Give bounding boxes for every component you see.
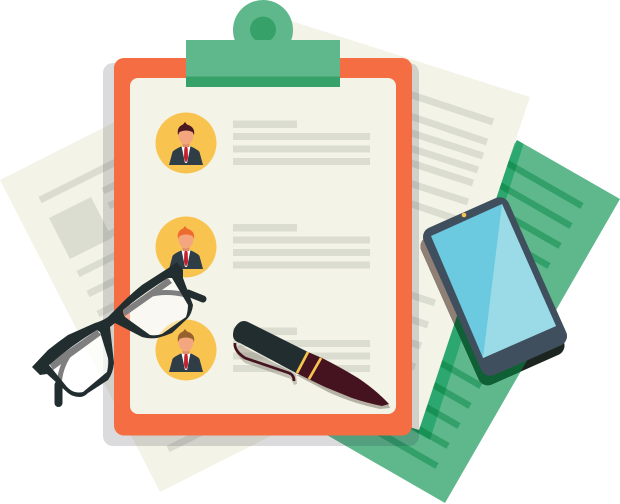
clipboard shadow [103, 63, 419, 446]
icon: smartphone [417, 194, 570, 388]
profile entry 1 [156, 112, 370, 174]
phone screen [431, 204, 556, 358]
panel: large cream paper [174, 19, 530, 430]
icon: pen [233, 321, 390, 409]
icon: avatar 1 [156, 112, 216, 174]
panel: orange clipboard [114, 58, 412, 436]
panel: green sheet [320, 140, 620, 503]
icon: avatar 2 [156, 216, 216, 278]
panel: tilted cream paper on the left [0, 89, 340, 492]
text placeholder lines 2 [233, 224, 370, 268]
phone camera dot [462, 213, 466, 217]
icon: eyeglasses [32, 262, 203, 403]
phone body [420, 194, 570, 379]
text placeholder lines 3 [233, 328, 370, 372]
text placeholder lines 1 [233, 120, 370, 165]
icon: avatar 3 [156, 320, 216, 380]
profile entry 3 [156, 320, 370, 380]
icon: green clipboard clip [186, 0, 340, 87]
phone shadow [420, 239, 564, 386]
profile entry 2 [156, 216, 370, 278]
